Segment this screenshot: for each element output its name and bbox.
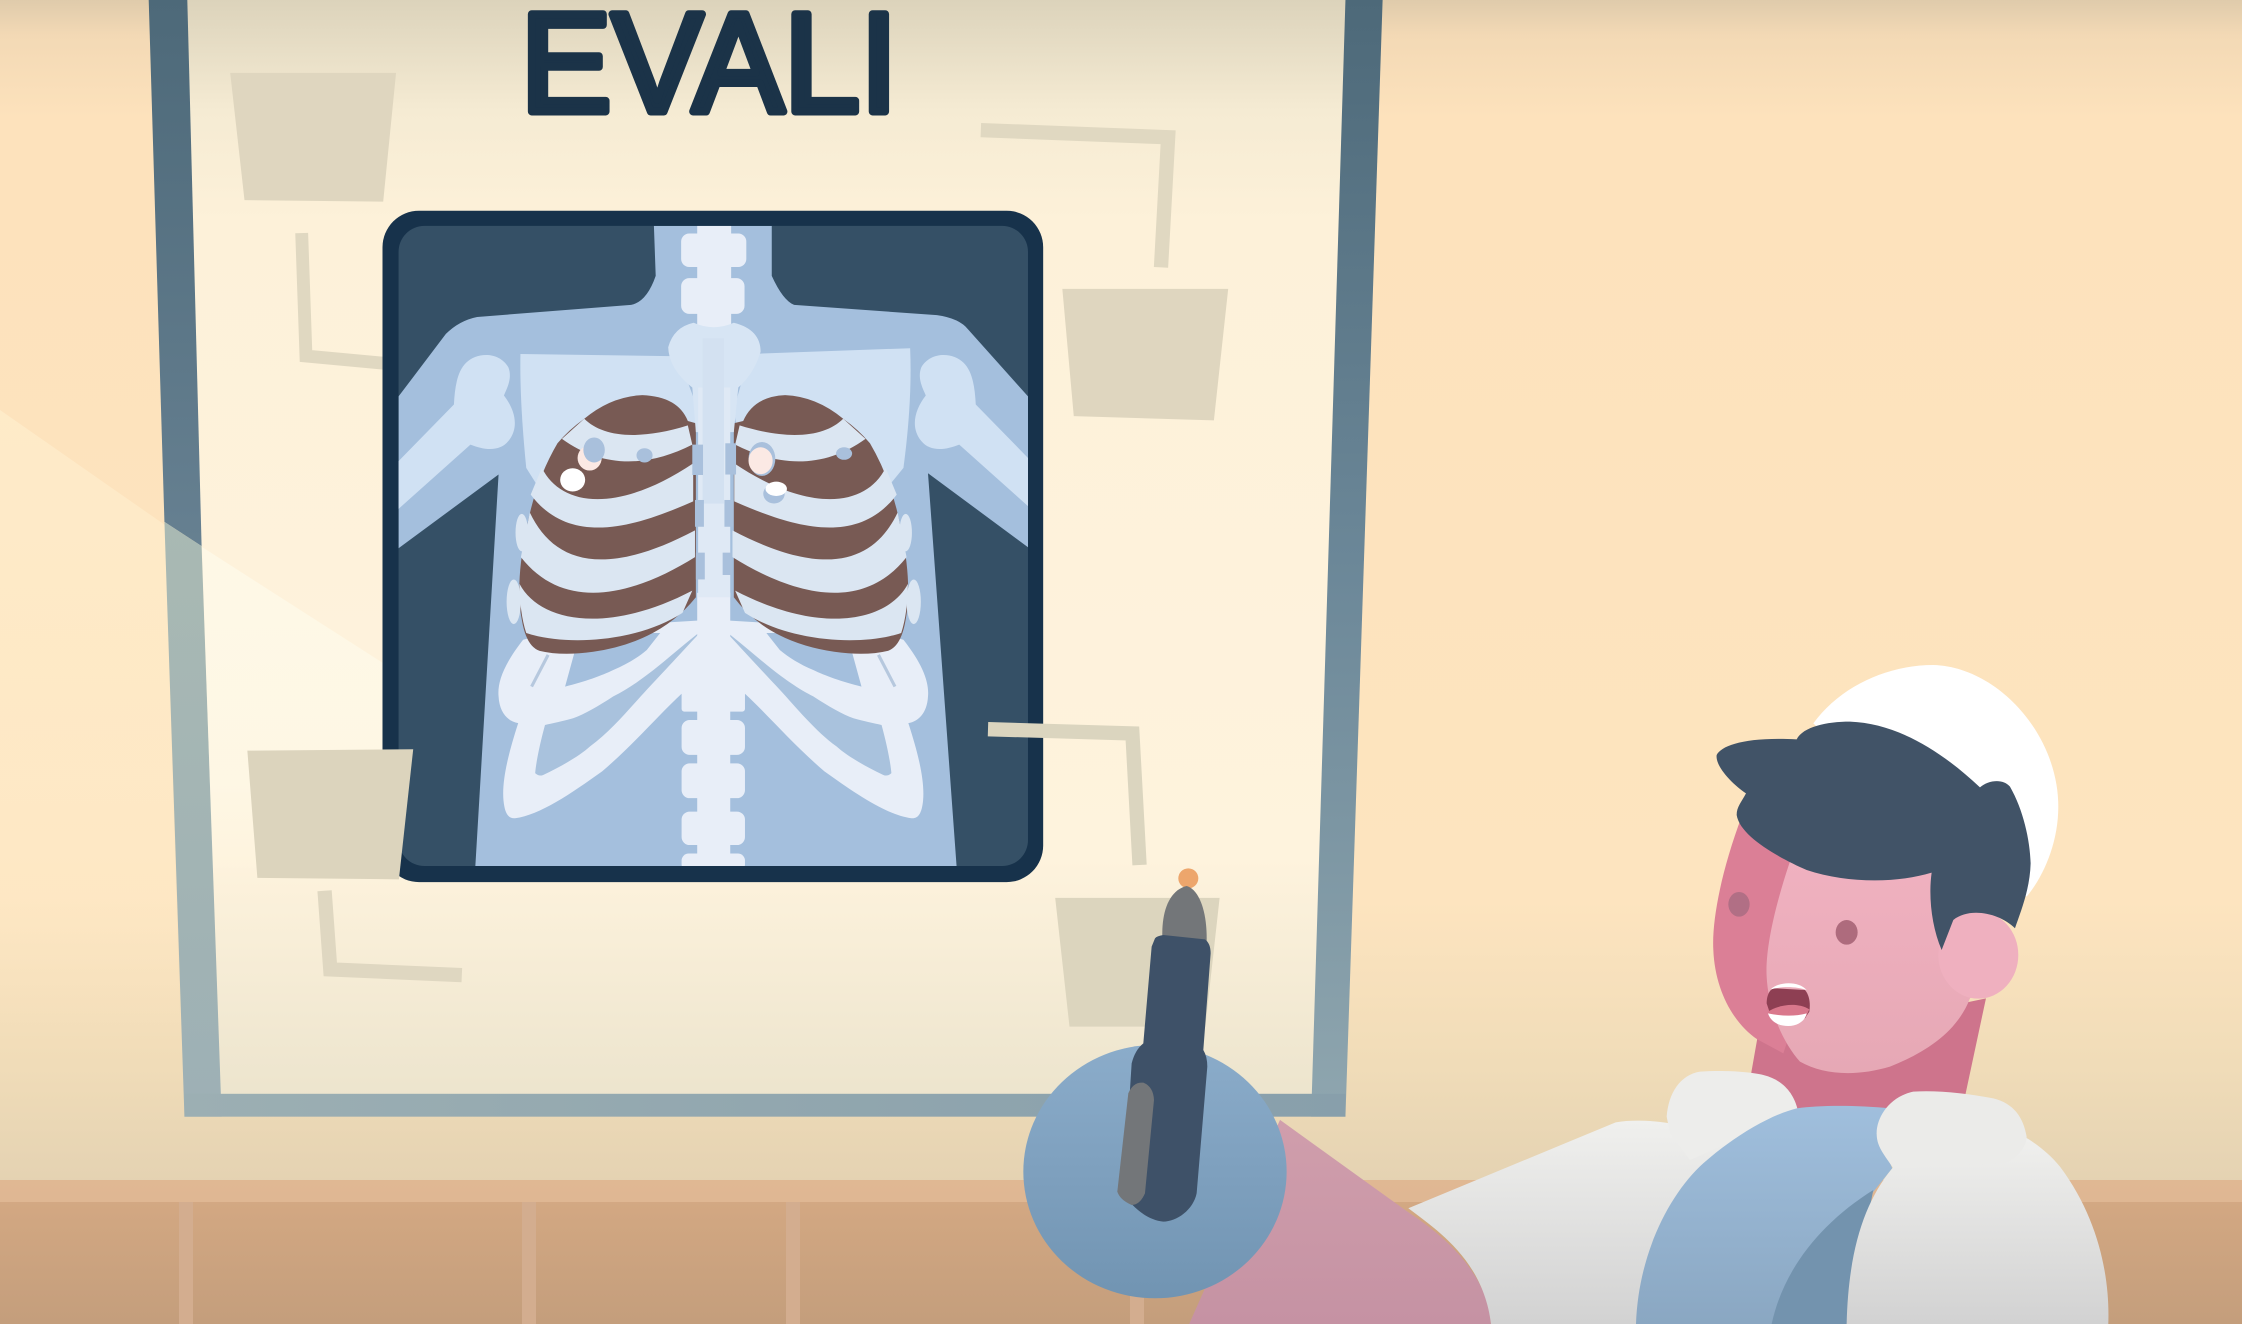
poster overlays on x-ray	[247, 729, 1220, 1027]
face	[1766, 837, 1993, 1073]
lower right ribs	[713, 620, 928, 818]
head shadow side	[1713, 817, 1817, 1053]
far eye	[1728, 892, 1750, 917]
poster frame	[149, 0, 1383, 1117]
poster paper	[179, 0, 1351, 1101]
leader line bottom left	[325, 891, 462, 975]
vertebra shadows	[692, 443, 736, 579]
poster	[149, 0, 1383, 1117]
left humerus	[399, 355, 515, 509]
mouth	[1767, 983, 1810, 1026]
shirt shadow	[1772, 1190, 1873, 1324]
chest x-ray	[382, 211, 1043, 882]
light beam on poster	[202, 547, 383, 878]
x-ray frame	[382, 211, 1043, 882]
lab coat and shirt	[1408, 1071, 2108, 1324]
leader line top right	[981, 130, 1168, 267]
halo	[1813, 665, 2058, 897]
light beam on wall	[0, 410, 185, 1185]
neck	[1750, 998, 1986, 1117]
clavicle joint	[668, 323, 761, 432]
shirt	[1636, 1106, 1892, 1324]
ear	[1938, 911, 2018, 999]
leader line left	[302, 233, 383, 363]
left lung	[519, 395, 696, 654]
near eye	[1836, 920, 1858, 945]
label placeholder bottom right	[1055, 898, 1220, 1027]
marker cap orange	[1178, 868, 1198, 888]
marker body	[1123, 935, 1211, 1222]
left scapula	[520, 354, 696, 483]
sternum column	[698, 432, 730, 597]
left ribs	[507, 419, 695, 640]
hair	[1717, 722, 2031, 950]
right lung opacities	[749, 442, 852, 504]
coat right	[1847, 1133, 2108, 1324]
marker grip	[1117, 1083, 1154, 1205]
right lung	[734, 395, 908, 654]
torso silhouette	[399, 226, 1028, 866]
marker tip	[1162, 886, 1207, 942]
label placeholder top left	[230, 73, 396, 202]
left lung opacities	[560, 437, 653, 491]
leader line bottom right	[988, 729, 1140, 865]
arm	[1189, 1120, 1491, 1324]
spine	[681, 226, 746, 871]
glove	[1023, 1045, 1287, 1298]
x-ray film	[399, 226, 1028, 866]
coat left	[1408, 1120, 1817, 1324]
label placeholder bottom left	[247, 749, 413, 879]
doctor	[1023, 665, 2108, 1324]
right humerus	[915, 355, 1031, 509]
right collar	[1877, 1091, 2027, 1168]
left collar	[1667, 1071, 1797, 1160]
right ribs	[732, 419, 921, 640]
label placeholder top right	[1062, 289, 1228, 420]
gloved hand with marker	[1023, 868, 1287, 1298]
lower left ribs	[498, 620, 713, 818]
right scapula	[735, 348, 910, 482]
hair and far eye	[1717, 722, 2031, 950]
head and neck	[1713, 817, 2018, 1117]
floor panelling	[0, 1180, 2242, 1324]
